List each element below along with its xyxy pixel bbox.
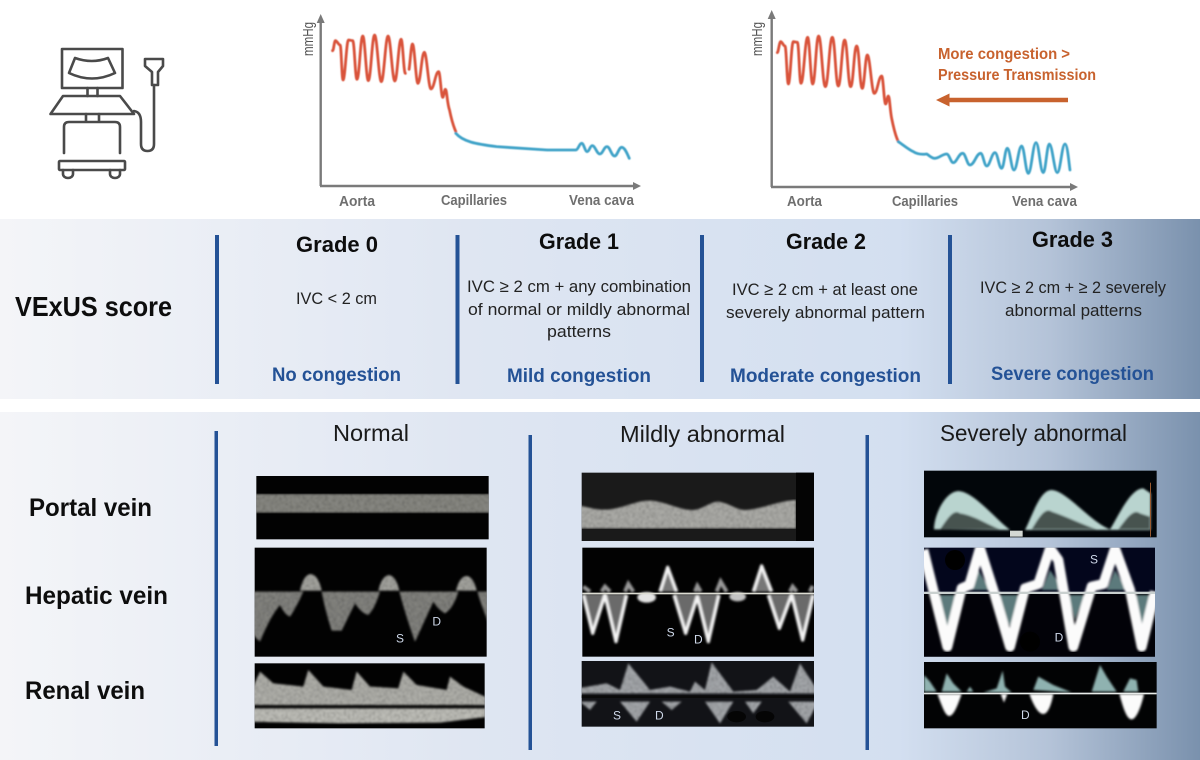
wave labels: S [667, 626, 675, 640]
red arterial curve [777, 36, 1070, 173]
grade 1: of normal or mildly abnormal [468, 300, 690, 319]
grade 1 [467, 229, 691, 387]
arrow: pressure transmission direction [936, 94, 1068, 106]
x axis labels: Aorta [339, 194, 376, 210]
row labels [25, 494, 168, 705]
column headings: Mildly abnormal [620, 421, 785, 447]
hepatic vein normal [250, 548, 490, 657]
grade 2: Moderate congestion [730, 365, 921, 387]
grade 1: patterns [547, 322, 611, 341]
grade 3: Severe congestion [991, 363, 1154, 385]
grade 3: IVC ≥ 2 cm + ≥ 2 severely [980, 278, 1166, 297]
grade 3: Grade 3 [1032, 227, 1113, 252]
grade 2: Grade 2 [786, 229, 866, 254]
doppler: mildly abnormal column [577, 473, 818, 727]
hepatic vein severe [923, 548, 1155, 657]
chart: congested pressure curve [750, 10, 1096, 210]
axes [768, 10, 1078, 191]
doppler: severely abnormal column [923, 471, 1157, 728]
icon: ultrasound machine [50, 49, 163, 178]
heading: VExUS score: VExUS score [15, 291, 172, 322]
grade 0: IVC < 2 cm [296, 289, 377, 308]
callout: more congestion: More congestion > [938, 46, 1070, 63]
grade 2: IVC ≥ 2 cm + at least one [732, 280, 918, 299]
wave labels: S [613, 708, 621, 722]
column headings [333, 420, 1127, 447]
renal vein severe [924, 662, 1157, 728]
portal vein normal [250, 476, 493, 539]
grade 1: IVC ≥ 2 cm + any combination [467, 277, 691, 296]
chart: normal pressure curve: Capillaries [441, 193, 507, 209]
hepatic vein mild: D [694, 633, 703, 647]
row labels: Hepatic vein [25, 582, 168, 610]
blue venous curve [456, 133, 629, 158]
renal vein normal [250, 663, 488, 728]
hepatic vein normal: D [432, 614, 441, 628]
chart: congested pressure curve: Vena cava [1012, 194, 1078, 210]
chart: normal pressure curve [301, 14, 641, 210]
doppler: normal column [250, 476, 493, 728]
renal vein mild: D [655, 708, 664, 722]
column headings: Severely abnormal [940, 420, 1127, 446]
column headings: Normal [333, 420, 409, 446]
grade 0 [272, 232, 401, 386]
callout: more congestion: Pressure Transmission [938, 67, 1096, 84]
hepatic vein mild [582, 548, 814, 657]
x axis labels: Aorta [787, 194, 823, 210]
red arterial curve [333, 35, 629, 158]
grade 3 [980, 227, 1166, 385]
chart: normal pressure curve: Vena cava [569, 193, 635, 209]
row labels: Renal vein [25, 677, 145, 705]
axes [317, 14, 641, 190]
grade 3: abnormal patterns [1005, 301, 1142, 320]
hepatic vein severe: D [1055, 631, 1064, 645]
wave labels: S [396, 632, 404, 646]
row labels: Portal vein [29, 494, 152, 522]
portal vein severe [924, 471, 1157, 537]
grade 2: severely abnormal pattern [726, 303, 925, 322]
portal vein mild [577, 473, 814, 541]
wave labels: D [1021, 708, 1030, 722]
renal vein mild [578, 661, 818, 727]
grade 2 [726, 229, 925, 387]
y axis label: mmHg [750, 22, 766, 56]
grade 0: Grade 0 [296, 232, 378, 257]
grade 0: No congestion [272, 364, 401, 386]
wave labels: S [1090, 552, 1098, 566]
chart: congested pressure curve: Capillaries [892, 194, 958, 210]
panel: Doppler patterns [0, 412, 1200, 760]
y axis label: mmHg [301, 22, 317, 56]
callout: more congestion [938, 46, 1096, 84]
blue venous curve [898, 142, 1070, 173]
panel: VExUS score grades [0, 219, 1200, 399]
grade 1: Grade 1 [539, 229, 619, 254]
grade 1: Mild congestion [507, 365, 651, 387]
